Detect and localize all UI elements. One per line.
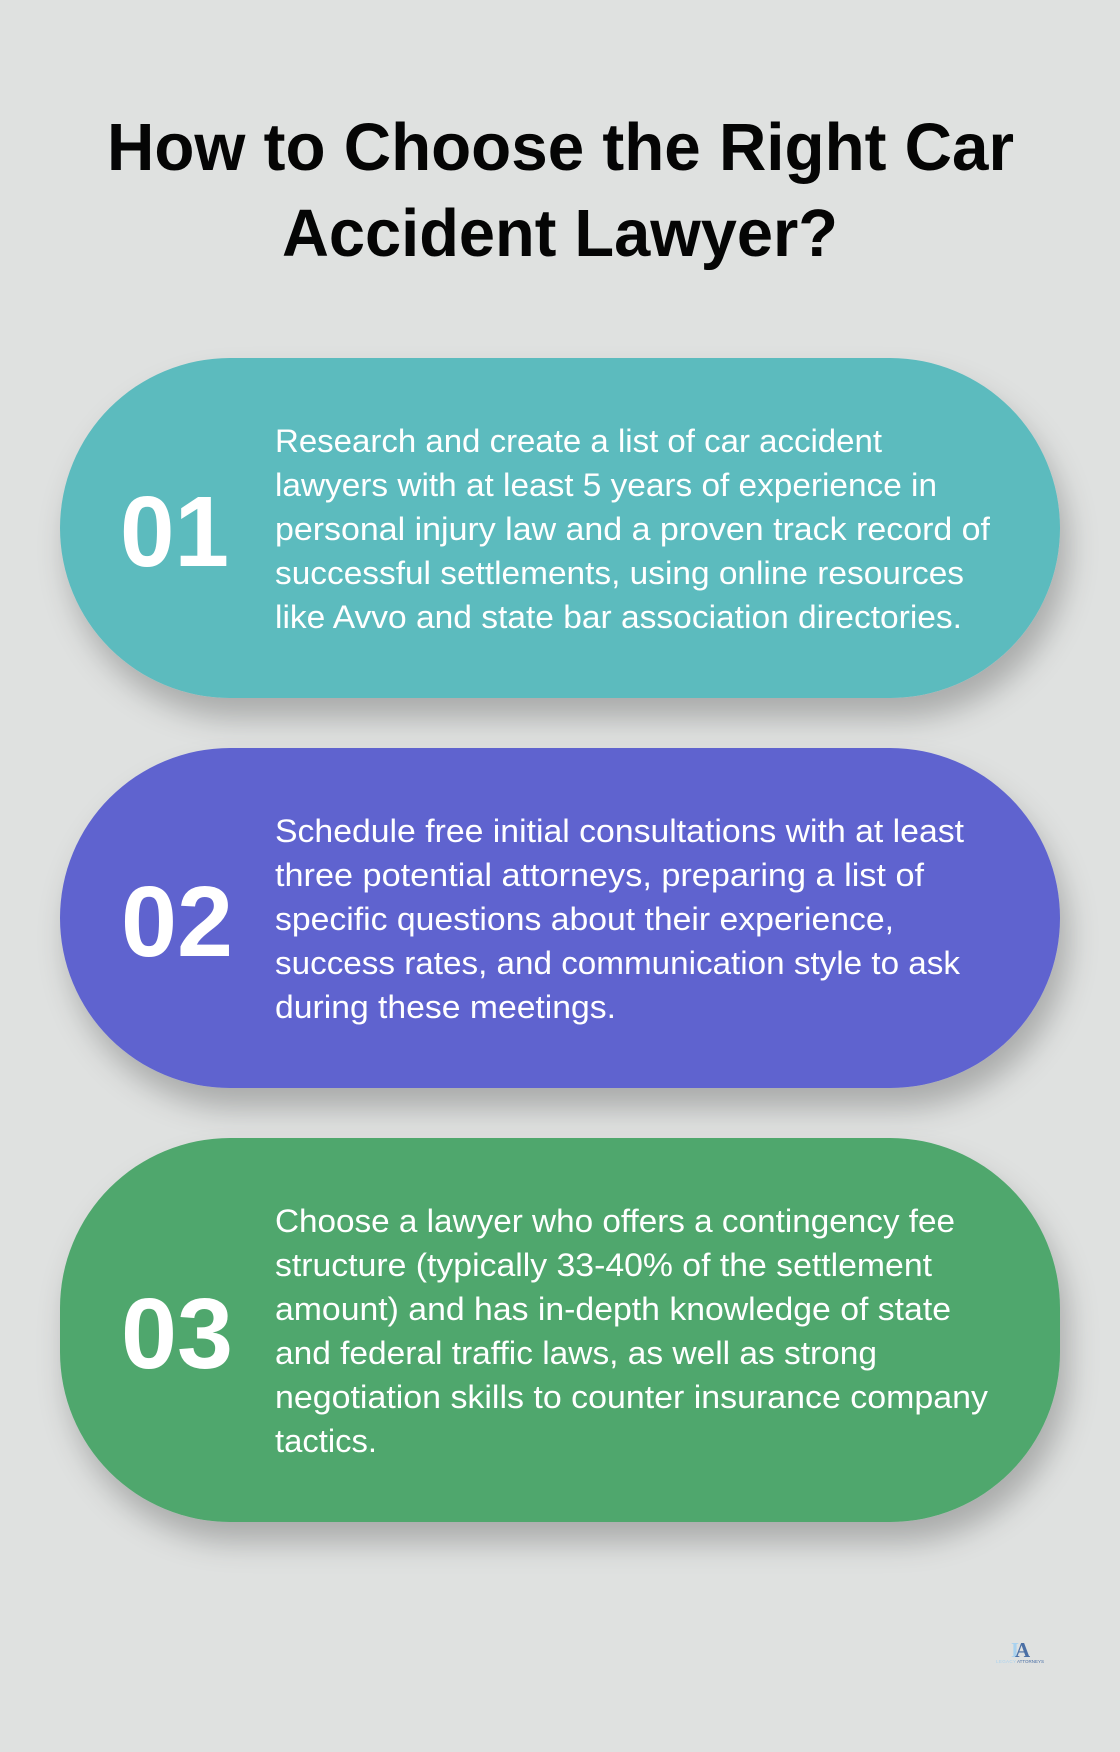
logo: Legacy Attorneys: ATTORNEYS [1017,1659,1044,1664]
title: How to Choose the Right Car [107,110,1014,185]
step 03 description: negotiation skills to counter insurance company [275,1379,989,1415]
step 03 description: structure (typically 33-40% of the settlement [275,1247,932,1283]
title [107,110,1014,271]
step 03 description: Choose a lawyer who offers a contingency fee [275,1203,955,1239]
logo: Legacy Attorneys: LEGACY [996,1659,1016,1664]
step 03 description: and federal traffic laws, as well as strong [275,1335,877,1371]
panel: step 01 [60,358,1060,698]
step 02 description: Schedule free initial consultations with at least [275,813,964,849]
panel: step 03 [60,1138,1060,1522]
step number 02: 02 [121,866,233,978]
title: Accident Lawyer? [282,196,838,271]
step 02 description: specific questions about their experience, [275,901,894,937]
step 03 description: amount) and has in-depth knowledge of state [275,1291,951,1327]
panel: step 02 [60,748,1060,1088]
step 01 description [275,423,991,635]
step 02 description: during these meetings. [275,989,616,1025]
step 01 description: lawyers with at least 5 years of experience in [275,467,937,503]
step number 03: 03 [121,1278,233,1390]
step 02 description [275,813,964,1025]
step 02 description: success rates, and communication style to ask [275,945,961,981]
step 03 description [275,1203,989,1459]
step number 01: 01 [120,476,229,588]
logo: Legacy Attorneys: I [1011,1638,1019,1662]
step 03 description: tactics. [275,1423,377,1459]
step 01 description: Research and create a list of car accident [275,423,882,459]
step 02 description: three potential attorneys, preparing a list of [275,857,925,893]
step 01 description: personal injury law and a proven track record of [275,511,991,547]
step 01 description: successful settlements, using online resources [275,555,964,591]
step 01 description: like Avvo and state bar association directories. [275,599,962,635]
logo: Legacy Attorneys [996,1638,1044,1664]
logo: Legacy Attorneys: A [1015,1638,1031,1662]
